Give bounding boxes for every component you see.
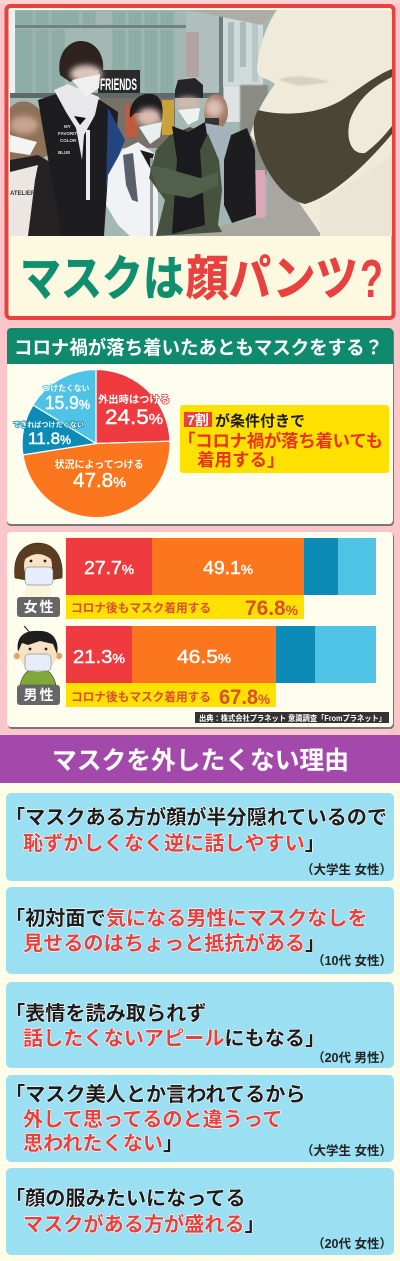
title: ?: [360, 249, 383, 309]
title: 顔パンツ: [186, 239, 358, 309]
icon: man with mask: [14, 626, 62, 685]
label: female: 女性: [24, 599, 54, 615]
pie labels: 状況によってつける: [54, 458, 144, 471]
section heading: reasons: [0, 735, 400, 783]
person: man in green coat with crossed arms: [149, 78, 222, 236]
quote card 1: 恥ずかしくなく逆に話しやすい」: [23, 832, 325, 855]
quote card 5: マスクがある方が盛れる」: [23, 1212, 265, 1236]
person: tall man in black vest: FAVORITE: [58, 131, 80, 136]
callout: 7 in 10: 「コロナ禍が落ち着いても: [178, 431, 383, 451]
quote card 4: 外して思ってるのと違うって: [23, 1108, 282, 1131]
bar: female: 76.8%: [245, 597, 299, 620]
quote card 2: （10代 女性）: [312, 953, 392, 968]
quote card 3: （20代 男性）: [312, 1050, 392, 1065]
quote card 5: （20代 女性）: [312, 1236, 392, 1251]
heading: コロナ禍が落ち着いたあともマスクをする？: [14, 333, 383, 360]
bar: male: 67.8%: [219, 686, 271, 709]
label: male: [17, 685, 60, 705]
quote card 4: 思われたくない」: [23, 1132, 183, 1155]
quote card 3: 「表情を読み取られず: [5, 1002, 206, 1025]
person: tall man in black vest: COLOR: [60, 138, 77, 143]
quote card 4: [5, 1075, 394, 1162]
quote card 3: 話したくないアピールにもなる」: [23, 1027, 325, 1050]
bar: male: コロナ後もマスク着用する: [71, 690, 211, 704]
pie chart: [22, 369, 170, 518]
sign text: FRIENDS: [100, 75, 137, 94]
quote card 5: 「顔の服みたいになってる: [5, 1187, 246, 1210]
person: back woman and dark coat: [204, 94, 265, 223]
quote card 3: [5, 982, 394, 1068]
callout: 7 in 10: 7割: [187, 412, 209, 428]
quote card 2: [5, 887, 394, 974]
title: [20, 239, 383, 309]
panel: pie chart after-corona mask use: [7, 328, 394, 526]
bar: male: [66, 626, 376, 709]
bar: female: 49.1%: [203, 557, 253, 578]
quote card 1: （大学生 女性）: [301, 862, 392, 877]
bar: male: 46.5 %: [177, 646, 231, 667]
quote card 4: 「マスク美人とか言われてるから: [5, 1083, 306, 1106]
bar: male: 21.3 %: [73, 646, 125, 667]
pie labels: 24.5%: [105, 406, 163, 429]
sign text: [98, 70, 140, 94]
callout: 7 in 10: が条件付きで: [215, 412, 305, 430]
bar: female: [66, 538, 376, 620]
face mask: [254, 69, 392, 204]
bar: female: コロナ後もマスク着用する: [71, 601, 211, 615]
person: tall man in black vest: [38, 41, 125, 236]
pie labels: [13, 383, 170, 492]
quote card 2: 見せるのはちょっと抵抗がある」: [23, 931, 325, 955]
pie labels: できればつけたくない: [13, 420, 84, 429]
title: マスクは: [20, 239, 184, 309]
person: woman at left: ATELIER: [10, 191, 36, 197]
section heading: reasons: マスクを外したくない理由: [52, 741, 349, 777]
quote card 1: 「マスクある方が顔が半分隠れているので: [5, 805, 387, 829]
pie labels: 外出時はつける: [98, 393, 170, 406]
label: male: 男性: [24, 687, 54, 703]
person: woman at left: [10, 102, 62, 236]
icon: woman with mask: [15, 543, 62, 597]
quote card 4: （大学生 女性）: [301, 1143, 392, 1158]
callout: 7 in 10: 着用する」: [197, 450, 284, 470]
bar: female: 27.7%: [84, 557, 134, 578]
pie labels: つけたくない: [43, 383, 90, 393]
callout: 7 in 10: [178, 405, 389, 473]
pie labels: 15.9%: [45, 393, 90, 413]
person: tall man in black vest: BLUE: [58, 150, 70, 155]
person: tall man in black vest: MY: [64, 124, 71, 129]
source note: 出典：株式会社プラネット 意識調査「Fromプラネット」: [199, 713, 386, 723]
mannequin head: [250, 10, 392, 236]
panel: hero photo and title: [6, 6, 394, 318]
pie labels: 47.8%: [73, 470, 126, 492]
person: man in white jacket: [106, 94, 163, 236]
quote card 1: [5, 793, 394, 881]
quote card 2: 「初対面で気になる男性にマスクなしを: [5, 907, 368, 930]
quote card 5: [5, 1168, 394, 1255]
panel: bars by gender: [7, 532, 394, 729]
label: female: [17, 597, 60, 617]
pie labels: 11.8%: [28, 429, 71, 448]
photo: masked crowd and mannequin wearing a mask: [10, 10, 392, 236]
